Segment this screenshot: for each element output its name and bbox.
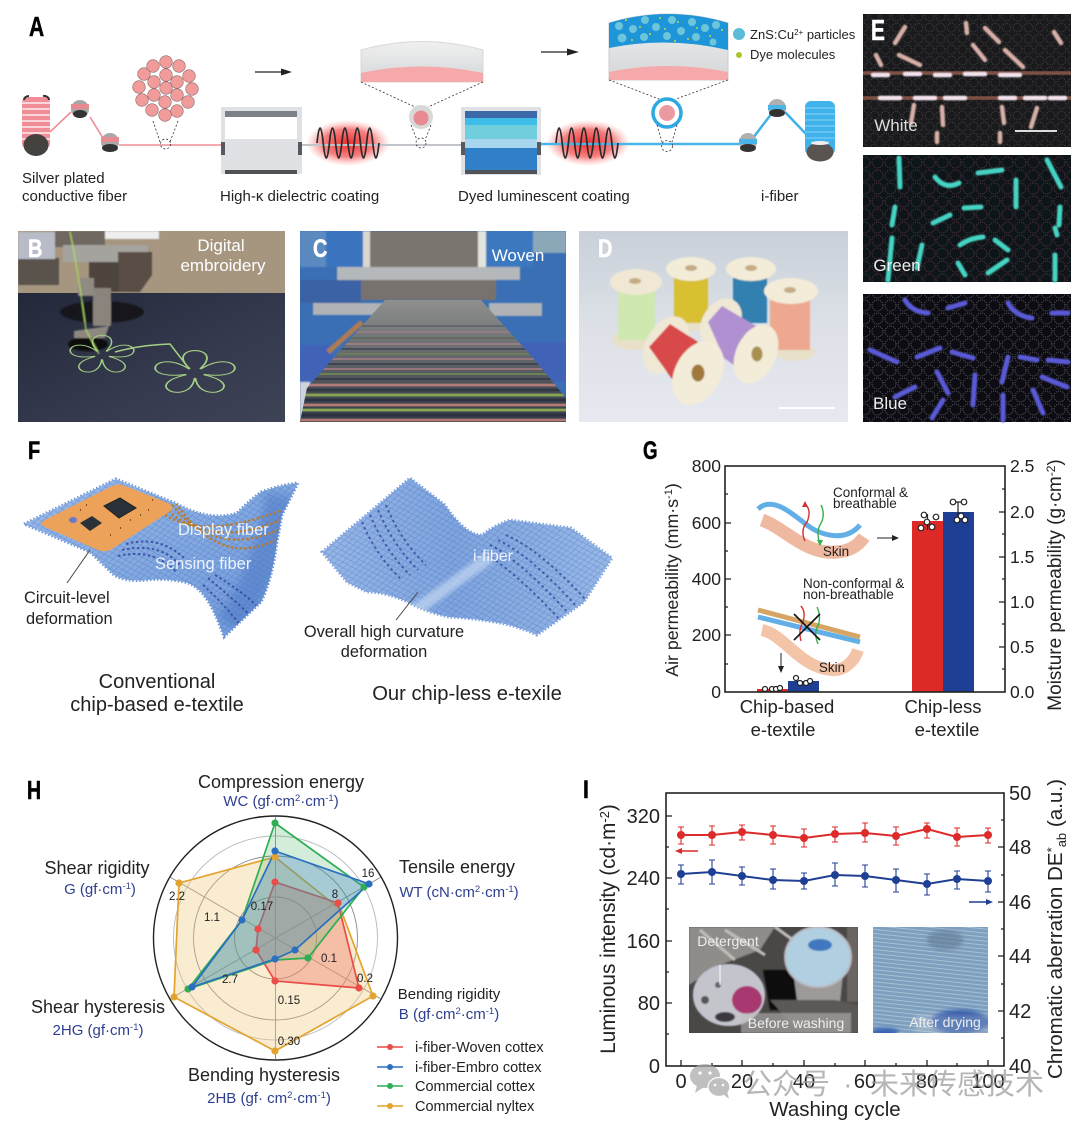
data points and error bars: [762, 499, 968, 692]
label: detergent: Detergent: [697, 933, 759, 949]
label: after drying: After drying: [909, 1014, 981, 1030]
labels: display and sensing fiber: Sensing fiber: [155, 555, 252, 573]
radar tick labels: 2.2: [169, 891, 185, 903]
axis label: bending rigidity: ): [494, 1006, 499, 1023]
left axis title: -1: [663, 489, 675, 499]
right axis tick labels: [1010, 456, 1035, 702]
x category labels: Chip-less: [904, 696, 982, 717]
arrow: to chip-based bars: [778, 653, 784, 673]
left axis title: -2: [597, 811, 612, 823]
axis label: shear hysteresis: Shear hysteresis: [31, 997, 165, 1017]
heater coil 2: [541, 120, 740, 166]
watermark text: ·: [843, 1069, 853, 1101]
heater coil 1: [302, 120, 461, 166]
icon: salmon spool: [764, 278, 818, 361]
axis label: bending hysteresis: 2HB (gf· cm: [207, 1090, 287, 1107]
axis label: bending rigidity: Bending rigidity: [398, 986, 501, 1003]
legend: particles and dye: particles: [803, 27, 856, 42]
radar series: i-fiber woven cottex: [256, 882, 359, 988]
axis label: tensile energy: ·cm: [480, 884, 505, 901]
icon: rollers and pink fiber: [50, 100, 221, 152]
icon: embroidered flowers: [68, 335, 238, 395]
panel letter E: E: [871, 15, 885, 47]
axis label: tensile energy: [399, 857, 519, 901]
panel D: spools photo: [579, 231, 848, 422]
axis label: shear hysteresis: [31, 997, 165, 1039]
label: white: White: [874, 116, 918, 135]
right axis tick labels: 1.5: [1010, 547, 1034, 567]
x axis tick labels: 0: [675, 1071, 687, 1093]
right axis tick labels: 2.0: [1010, 502, 1035, 522]
dielectric coating bath: [221, 107, 302, 174]
panel H: radar chart: [27, 772, 544, 1115]
panel letter I: I: [583, 775, 589, 803]
arrow: red series to left axis: [675, 848, 698, 854]
process step labels: Dyed luminescent coating: [458, 188, 630, 205]
left axis tick labels: 240: [627, 868, 660, 890]
axis label: shear rigidity: Shear rigidity: [44, 858, 150, 878]
legend: particles and dye: 2+: [794, 28, 804, 37]
left axis title: ): [662, 483, 682, 489]
right axis tick labels: 44: [1009, 946, 1031, 968]
label: green: Green: [873, 256, 921, 275]
panel F: e-textile comparison: [20, 437, 615, 716]
right axis title: Moisture permeability (g·cm: [1045, 476, 1066, 711]
photo: green: [863, 155, 1071, 282]
axis label: bending hysteresis: ·cm: [292, 1090, 317, 1107]
inset: non-conformal and non-breathable: Non-conformal &: [803, 576, 904, 591]
legend: radar series: [377, 1040, 544, 1115]
arrow: detergent pointer: [720, 965, 721, 985]
left axis tick labels: 320: [627, 806, 660, 828]
axis label: shear rigidity: G (gf·cm: [64, 881, 122, 898]
left axis title: ): [597, 804, 620, 811]
x category labels: [740, 696, 982, 740]
right axis tick labels: 42: [1009, 1001, 1031, 1023]
mesh: chip-less textile: [320, 475, 615, 640]
left axis tick labels: 160: [627, 931, 660, 953]
legend: radar series: i-fiber-Embro cottex: [415, 1060, 542, 1076]
x category labels: Chip-based: [740, 696, 834, 717]
scale bar: [1015, 130, 1057, 132]
x axis tick labels: 20: [731, 1071, 753, 1093]
icon: silver fiber spool: [22, 96, 50, 156]
legend: particles and dye: Dye molecules: [750, 47, 836, 62]
arrow: blue series to right axis: [969, 899, 993, 905]
watermark: WeChat account: [690, 1064, 1044, 1101]
radar outer circle: [154, 816, 398, 1060]
axis label: shear hysteresis: -1: [130, 1022, 138, 1033]
photo: blue: [863, 294, 1071, 422]
panel A: fabrication process: [22, 12, 856, 205]
x category labels: e-textile: [751, 719, 815, 740]
x axis tick labels: [675, 1071, 1005, 1093]
radar tick labels: [169, 868, 374, 1048]
x axis tick labels: 60: [854, 1071, 876, 1093]
panel letter C: C: [313, 235, 327, 263]
panel G: permeability bar chart: [643, 436, 1066, 740]
axis label: shear hysteresis: 2HG (gf·cm: [53, 1022, 130, 1039]
axis label: bending hysteresis: ): [326, 1090, 331, 1107]
radar series: i-fiber embro cottex: [192, 851, 369, 987]
x axis tick labels: 100: [971, 1071, 1005, 1093]
radar tick labels: 1.1: [204, 912, 220, 924]
label: digital embroidery: embroidery: [180, 256, 266, 275]
icon: red spool: [642, 315, 724, 405]
axis label: bending hysteresis: [188, 1065, 340, 1107]
legend: radar series: Commercial nyltex: [415, 1099, 535, 1115]
axis label: shear hysteresis: ): [138, 1022, 143, 1039]
axis label: shear rigidity: ): [131, 881, 136, 898]
panel C: woven fabric photo: [300, 231, 566, 422]
luminescent coating bath: [461, 107, 541, 175]
labels: display and sensing fiber: Display fiber: [178, 521, 269, 539]
caption: our chip-less e-textile: Our chip-less e-texile: [372, 683, 562, 705]
axis label: tensile energy: Tensile energy: [399, 857, 515, 877]
axis label: compression energy: Compression energy: [198, 772, 364, 792]
icon: yellow spool: [666, 257, 716, 331]
axis label: tensile energy: ): [514, 884, 519, 901]
radar tick labels: 0.1: [321, 953, 337, 965]
arrow: process step 2: [541, 48, 579, 56]
panel B: digital embroidery photo: [18, 231, 285, 422]
right axis tick labels: 0.0: [1010, 682, 1035, 702]
inset: conformal and breathable: breathable: [833, 496, 897, 511]
inset photo: after drying: [871, 927, 990, 1036]
inset: conformal and breathable: Conformal &: [833, 485, 908, 500]
left axis tick labels: [692, 456, 721, 702]
icon: i-fiber spool: [805, 101, 835, 162]
caption: conventional chip-based e-textile: chip-based e-textile: [70, 694, 244, 716]
radar tick labels: 0.30: [278, 1036, 300, 1048]
callout: circuit-level deformation: Circuit-level: [24, 589, 110, 607]
right axis title: Chromatic aberration DE: [1044, 852, 1067, 1079]
watermark text: [743, 1068, 1044, 1101]
right axis tick labels: 48: [1009, 837, 1031, 859]
radar grid: [171, 817, 380, 1059]
legend: radar series: i-fiber-Woven cottex: [415, 1040, 544, 1056]
arrow: to chip-less bars: [877, 535, 899, 541]
process step labels: [22, 170, 799, 205]
label: before washing: Before washing: [748, 1015, 844, 1031]
caption: conventional chip-based e-textile: Conventional: [99, 671, 215, 693]
axis label: compression energy: ·cm: [300, 793, 325, 810]
magnified luminescent layer: [609, 14, 728, 99]
callout: overall high curvature deformation: Overall high curvature: [304, 623, 464, 641]
circuit board with chips: [42, 484, 172, 551]
radar tick labels: 0.17: [251, 901, 273, 913]
inset: non-conformal and non-breathable: [758, 576, 904, 675]
callout: circuit-level deformation: deformation: [26, 610, 113, 628]
panel E: luminescent photos: [863, 14, 1071, 422]
caption: conventional chip-based e-textile: [70, 671, 244, 716]
photo: white: [863, 14, 1071, 147]
process step labels: i-fiber: [761, 188, 799, 205]
right axis tick labels: 1.0: [1010, 592, 1035, 612]
watermark text: 公众号: [743, 1069, 830, 1101]
axis label: bending rigidity: 2: [455, 1006, 461, 1017]
right axis title: ): [1045, 459, 1066, 466]
inset: conformal and breathable: [758, 485, 908, 559]
woven fabric stripes: [300, 300, 566, 422]
process step labels: High-κ dielectric coating: [220, 188, 379, 205]
axis label: bending rigidity: [398, 986, 501, 1023]
label: blue: Blue: [873, 394, 907, 413]
right axis title: -2: [1044, 465, 1058, 476]
x axis tick labels: 40: [793, 1071, 815, 1093]
inset: non-conformal and non-breathable: non-breathable: [803, 587, 894, 602]
axis label: bending rigidity: -1: [486, 1006, 494, 1017]
legend: particles and dye: [733, 27, 856, 62]
left axis tick labels: 200: [692, 625, 721, 645]
icon: fiber bundle cross-section: [133, 56, 198, 149]
chart axes and ticks: [725, 466, 1005, 692]
x axis tick labels: 80: [916, 1071, 938, 1093]
axis label: shear rigidity: -1: [122, 881, 131, 892]
bars: [757, 512, 974, 692]
axis label: bending hysteresis: Bending hysteresis: [188, 1065, 340, 1085]
left axis title: Air permeability (mm·s: [662, 499, 682, 677]
axis label: bending hysteresis: 2: [287, 1090, 292, 1101]
right axis tick labels: 2.5: [1010, 456, 1034, 476]
arrow: process step 1: [255, 68, 292, 76]
process step labels: Silver plated: [22, 170, 105, 187]
radar tick labels: 0.15: [278, 995, 300, 1007]
inset photo: before washing: [689, 927, 858, 1033]
left axis tick labels: 400: [692, 569, 721, 589]
label: i-fiber: i-fiber: [473, 548, 514, 565]
callout: overall high curvature deformation: deformation: [341, 643, 427, 661]
axis label: bending hysteresis: -1: [317, 1090, 326, 1101]
right axis title: ab: [1054, 833, 1069, 847]
labels: display and sensing fiber: [155, 521, 269, 573]
label: woven: Woven: [492, 246, 544, 265]
radar tick labels: 2.7: [222, 974, 238, 986]
panel letter B: B: [28, 235, 42, 263]
axis label: bending rigidity: B (gf·cm: [399, 1006, 455, 1023]
icon: WeChat bubbles: [690, 1064, 730, 1099]
i-fiber cross-section: [653, 99, 681, 152]
icon: green spool: [610, 269, 662, 350]
right axis tick labels: 46: [1009, 892, 1031, 914]
right axis tick labels: [1009, 783, 1031, 1078]
callout: overall high curvature deformation: [304, 592, 464, 661]
inset: non-conformal and non-breathable: Skin: [819, 660, 845, 675]
series: chromatic aberration (blue): [677, 860, 993, 905]
right axis title: (a.u.): [1044, 779, 1067, 833]
magnified dielectric layer: [361, 42, 483, 148]
process step labels: conductive fiber: [22, 188, 127, 205]
axis label: tensile energy: WT (cN·cm: [399, 884, 475, 901]
icon: blue spool: [726, 257, 776, 323]
left axis tick labels: 0: [649, 1056, 660, 1078]
watermark text: 未来传感技术: [870, 1068, 1044, 1101]
radar markers: [170, 819, 377, 1055]
panel letter A: A: [29, 12, 44, 43]
axis label: compression energy: [198, 772, 364, 810]
left axis tick labels: 80: [638, 993, 660, 1015]
icon: rollers and blue fiber: [739, 99, 806, 152]
right axis tick labels: 50: [1009, 783, 1031, 805]
axis label: bending rigidity: ·cm: [461, 1006, 486, 1023]
radar series: commercial cottex: [188, 823, 364, 989]
x axis title: Washing cycle: [769, 1098, 901, 1121]
left axis tick labels: 0: [711, 682, 721, 702]
axis label: shear rigidity: [44, 858, 150, 898]
axis label: compression energy: WC (gf·cm: [223, 793, 295, 810]
left axis tick labels: [627, 806, 660, 1078]
radar tick labels: 0.2: [357, 973, 373, 985]
label: digital embroidery: [181, 239, 266, 274]
radar tick labels: 16: [362, 868, 374, 880]
left axis title: Luminous intensity (cd·m: [597, 823, 620, 1054]
left axis tick labels: 600: [692, 513, 721, 533]
panel letter H: H: [27, 775, 41, 805]
axis label: compression energy: -1: [325, 793, 334, 804]
x category labels: e-textile: [915, 719, 979, 740]
axis label: tensile energy: 2: [475, 884, 480, 895]
legend: radar series: Commercial cottex: [415, 1079, 536, 1095]
axis label: compression energy: ): [334, 793, 339, 810]
scale bar: [779, 407, 835, 409]
left axis tick labels: 800: [692, 456, 721, 476]
panel letter D: D: [598, 235, 612, 263]
axis label: tensile energy: -1: [505, 884, 514, 895]
series: luminous intensity (red): [675, 823, 992, 854]
panel I: washing durability chart: [583, 775, 1069, 1121]
inset: conformal and breathable: Skin: [823, 544, 849, 559]
legend: particles and dye: ZnS:Cu: [750, 27, 794, 42]
mesh: conventional chip-based textile: [20, 475, 305, 645]
right axis title: *: [1044, 847, 1059, 852]
radar tick labels: 8: [332, 889, 338, 901]
panel letter G: G: [643, 436, 658, 465]
right axis tick labels: 0.5: [1010, 637, 1034, 657]
chart axes and ticks: [666, 793, 1004, 1066]
radar series: commercial nyltex: [174, 857, 373, 1051]
callout: circuit-level deformation: [24, 550, 113, 628]
label: digital embroidery: Digital: [197, 236, 245, 255]
axis label: compression energy: 2: [295, 793, 300, 804]
right axis tick labels: 40: [1009, 1056, 1031, 1078]
panel letter F: F: [28, 437, 40, 465]
icon: purple spool: [700, 298, 780, 384]
